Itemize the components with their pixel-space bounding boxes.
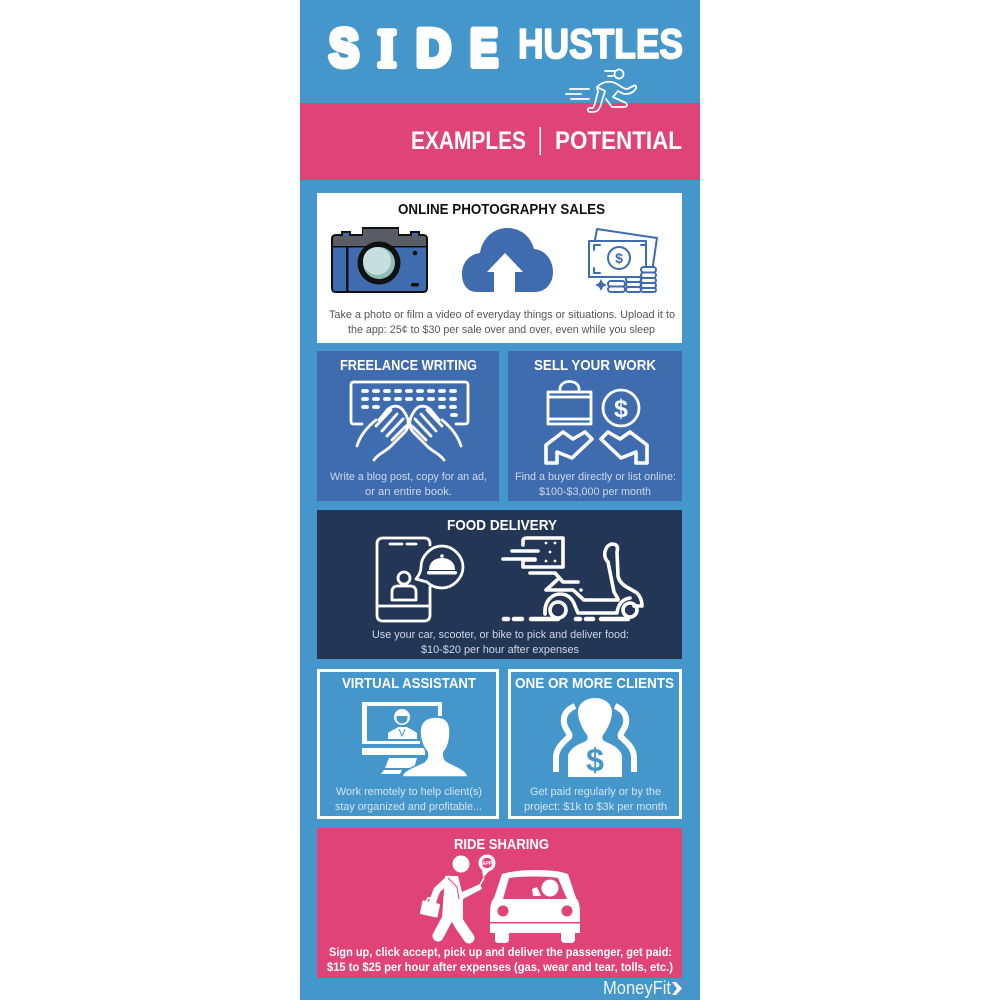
heading: online photography sales: ONLINE PHOTOGRAPHY SALES: [398, 201, 605, 218]
icon: money and coins: $: [615, 250, 623, 266]
icon: delivery scooter: [503, 538, 642, 619]
text: freelance description: Write a blog post, copy for an ad,: [330, 471, 487, 483]
title band: [300, 103, 700, 180]
title: [329, 19, 683, 78]
heading: freelance writing: FREELANCE WRITING: [340, 357, 477, 374]
text: online photography description: [329, 309, 675, 336]
text: freelance description: or an entire book.: [365, 486, 452, 498]
title: S: [329, 19, 359, 78]
text: online photography description: the app: 25¢ to $30 per sale over and over, even while you sleep: [348, 324, 655, 336]
heading: virtual assistant: VIRTUAL ASSISTANT: [342, 675, 476, 692]
icon: running figure: [566, 70, 636, 112]
text: virtual assistant description: stay organized and profitable...: [335, 801, 482, 813]
icon: cloud upload: [462, 228, 553, 292]
text: clients description: Get paid regularly or by the: [530, 786, 661, 798]
panel: food delivery: [317, 510, 682, 659]
icon: person with phone app: APP: [482, 861, 493, 867]
text: ride sharing description: $15 to $25 per hour after expenses (gas, wear and tear, tolls, etc.): [327, 961, 673, 974]
icon: client group with dollar: [556, 698, 634, 778]
title: HUSTLES: [518, 20, 683, 67]
background column: [300, 0, 700, 1000]
title: I: [378, 20, 396, 78]
subtitle: EXAMPLES: [411, 127, 526, 155]
icon: client group with dollar: $: [586, 742, 604, 778]
subtitle: POTENTIAL: [555, 127, 682, 155]
icon: car with driver: [490, 870, 580, 943]
heading: one or more clients: ONE OR MORE CLIENTS: [515, 675, 674, 692]
text: food delivery description: Use your car, scooter, or bike to pick and deliver food:: [372, 629, 629, 641]
panel: one or more clients: [510, 670, 680, 818]
icon: video call with assistant: [362, 702, 468, 777]
text: food delivery description: $10-$20 per hour after expenses: [421, 644, 579, 656]
text: clients description: project: $1k to $3k per month: [524, 801, 667, 813]
text: ride sharing description: [327, 946, 673, 974]
panel: virtual assistant: [318, 670, 498, 818]
text: sell your work description: $100-$3,000 per month: [539, 486, 651, 498]
panel: sell your work: [508, 351, 682, 501]
text: sell your work description: Find a buyer directly or list online:: [515, 471, 676, 483]
title: D: [416, 19, 451, 78]
text: virtual assistant description: Work remotely to help client(s): [336, 786, 482, 798]
text: virtual assistant description: [335, 786, 482, 813]
panel: online photography sales: [317, 193, 682, 343]
text: clients description: [524, 786, 667, 813]
panel: ride sharing: [317, 828, 682, 978]
text: sell your work description: [515, 471, 676, 498]
icon: person with phone app: [420, 854, 496, 938]
heading: ride sharing: RIDE SHARING: [454, 836, 549, 853]
heading: food delivery: FOOD DELIVERY: [447, 517, 557, 534]
icon: bag, coin and hands: [546, 382, 647, 463]
heading: sell your work: SELL YOUR WORK: [534, 357, 656, 374]
text: online photography description: Take a photo or film a video of everyday things or situations. Upload it to: [329, 309, 675, 321]
icon: keyboard and hands: [351, 382, 468, 460]
title: E: [470, 19, 498, 78]
icon: bag, coin and hands: $: [614, 395, 628, 423]
text: food delivery description: [372, 629, 629, 656]
subtitle: [411, 127, 682, 155]
panel: freelance writing: [317, 351, 499, 501]
text: freelance description: [330, 471, 487, 498]
logo: MoneyFit: MoneyFit: [603, 978, 671, 998]
icon: money and coins: [589, 229, 657, 292]
text: ride sharing description: Sign up, click accept, pick up and deliver the passenger, get paid:: [329, 946, 672, 959]
icon: phone with food order: [377, 538, 463, 621]
icon: camera: [332, 228, 427, 292]
